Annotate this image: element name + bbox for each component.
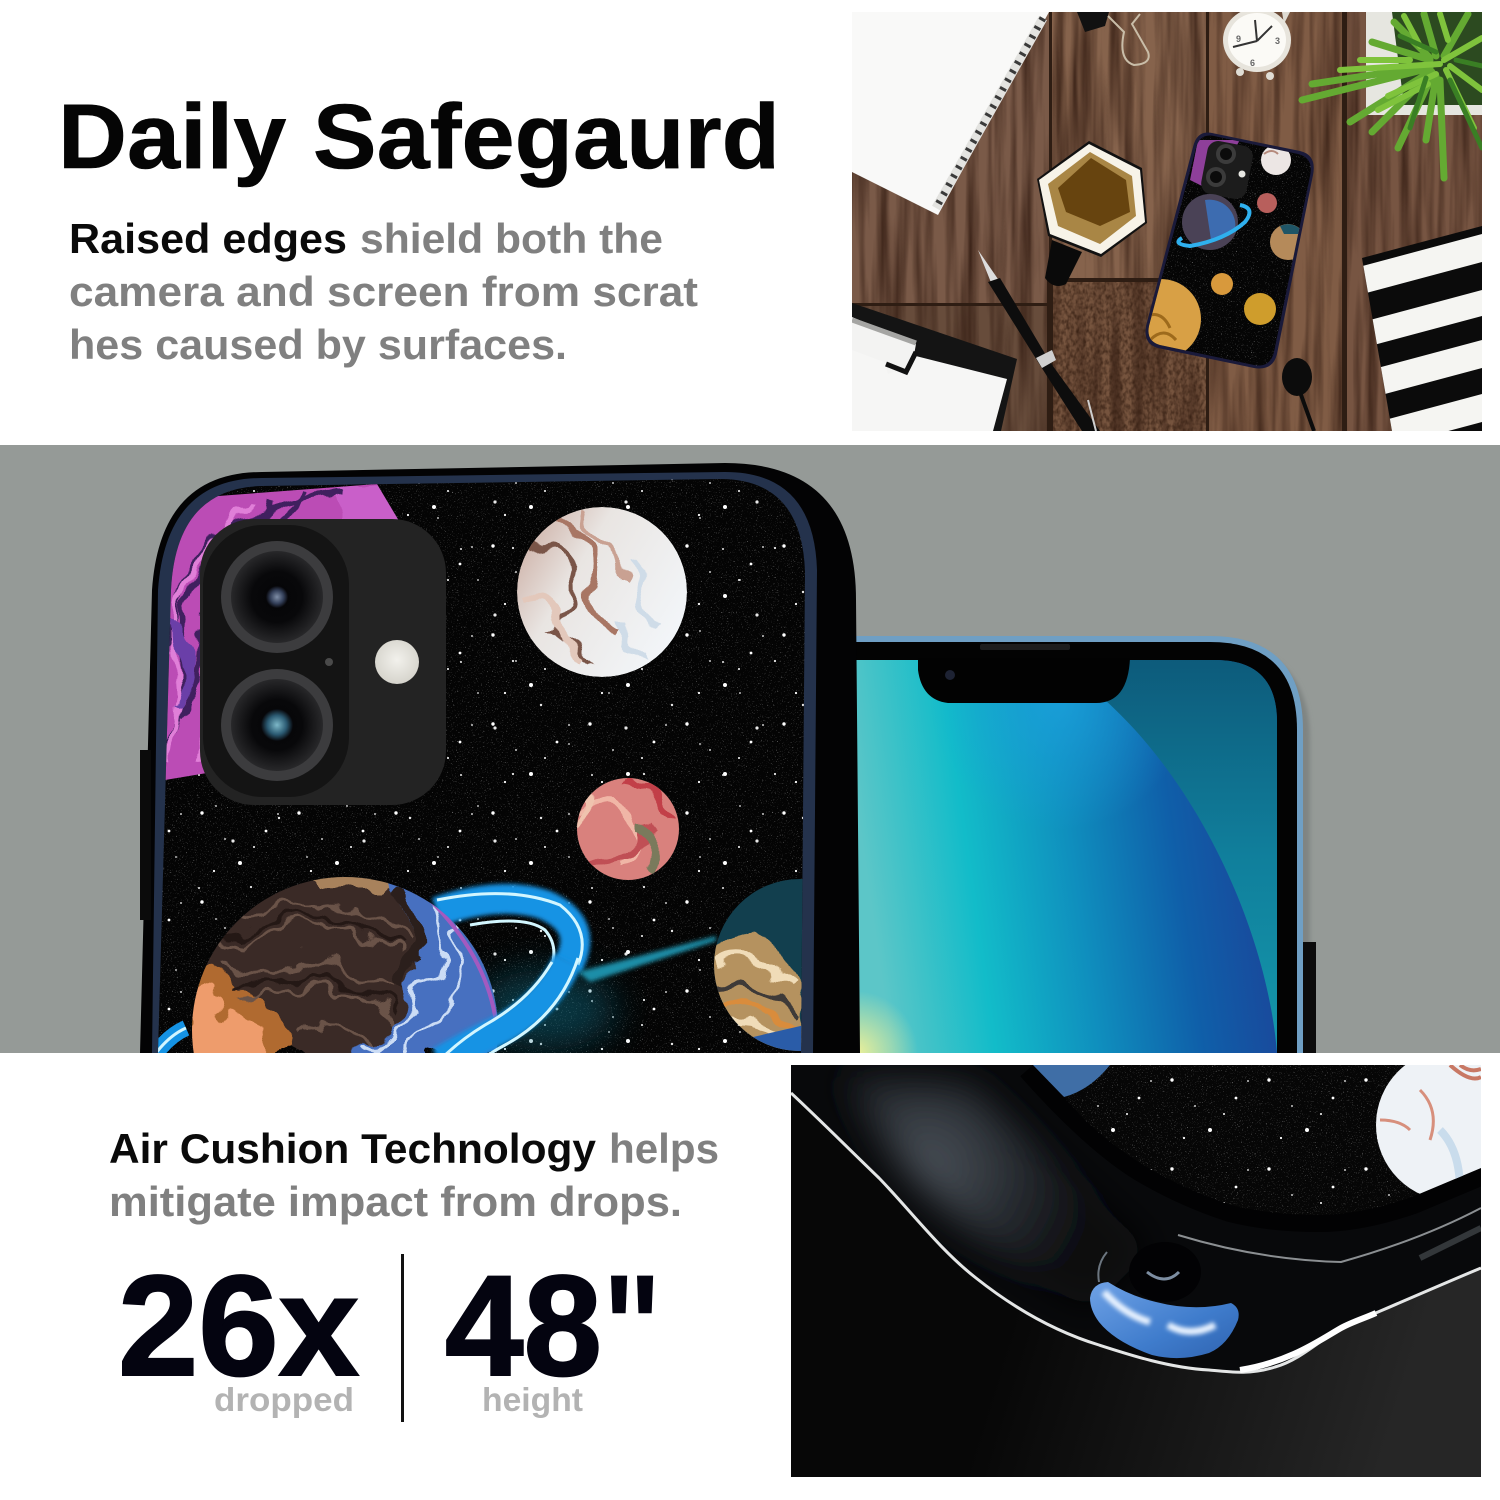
text block: air cushion: helps <box>609 1125 719 1172</box>
clipboard <box>852 303 1017 431</box>
plant <box>1302 12 1482 178</box>
grey band panel <box>0 445 1500 1053</box>
photo: bumper close-up with water drop <box>791 1049 1500 1477</box>
stat divider <box>401 1254 404 1422</box>
text block: raised edges description: camera and screen from scrat <box>69 268 698 315</box>
front camera <box>945 670 955 680</box>
side buttons <box>140 750 148 920</box>
flash <box>375 640 419 684</box>
notch <box>918 658 1130 703</box>
purple marble <box>166 484 398 780</box>
ring back <box>437 899 575 965</box>
stat: 48 inch height: 48 <box>445 1247 602 1406</box>
wood desk <box>852 12 1482 431</box>
sensor dot <box>325 658 333 666</box>
stat: 26x dropped: dropped <box>214 1381 354 1418</box>
earphone <box>1282 358 1314 431</box>
starfield region <box>1025 1049 1500 1225</box>
dark inner band <box>1033 1065 1481 1215</box>
stat: 26x dropped: 26x <box>118 1247 359 1406</box>
coffee cup <box>1037 141 1147 286</box>
bumper inner highlight <box>1178 1208 1481 1262</box>
right planet <box>714 879 802 1051</box>
bumper gloss highlight <box>840 1075 1150 1310</box>
clock <box>1223 8 1291 80</box>
side button <box>1303 942 1316 1053</box>
front phone <box>840 636 1316 1053</box>
title: Daily Safegaurd <box>58 86 780 188</box>
screen <box>850 660 1277 1053</box>
text block: raised edges description <box>69 215 698 368</box>
upper lens <box>221 541 333 653</box>
clock: 3 <box>1275 36 1280 46</box>
photo: phone on wooden desk <box>852 8 1485 456</box>
back phone <box>130 460 860 1062</box>
text block: raised edges description: shield both the <box>360 215 663 262</box>
clock: 6 <box>1250 58 1255 68</box>
front phone shadow <box>1289 671 1310 942</box>
stat: 48 inch height <box>445 1247 658 1418</box>
lower lens <box>221 669 333 781</box>
phones illustration <box>130 460 1316 1062</box>
ring teal glow <box>475 970 615 1050</box>
speaker <box>980 644 1070 650</box>
case body <box>140 463 860 1053</box>
front phone body <box>840 636 1303 1053</box>
text block: air cushion: mitigate impact from drops. <box>109 1178 682 1225</box>
ring left segment <box>156 1028 186 1053</box>
comet streak <box>578 936 716 982</box>
stat: 48 inch height: height <box>482 1381 583 1418</box>
glossy bumper <box>791 1065 1481 1372</box>
text block: air cushion <box>109 1125 719 1225</box>
bump base <box>200 519 446 805</box>
camera bump <box>200 519 446 805</box>
binder clip <box>1077 12 1149 65</box>
ringed planet edge <box>1025 1065 1110 1097</box>
clock: 9 <box>1236 34 1241 44</box>
text block: raised edges description: Raised edges <box>69 215 347 262</box>
stat: 48 inch height: '' <box>606 1247 658 1406</box>
marble planet <box>517 505 687 677</box>
text block: air cushion: Air Cushion Technology <box>109 1125 597 1172</box>
mini phone case <box>1146 132 1314 368</box>
white highlight edge <box>791 1093 1481 1372</box>
striped notebook <box>1362 226 1482 431</box>
water drop <box>1090 1242 1239 1358</box>
red planet <box>577 778 679 880</box>
ring front <box>440 960 568 1062</box>
notebook <box>852 12 1049 215</box>
ringed planet <box>158 877 718 1053</box>
lower surface <box>791 1065 1481 1477</box>
starfield <box>150 470 820 1060</box>
marble planet edge <box>1376 1049 1500 1201</box>
pen <box>978 250 1100 431</box>
text block: raised edges description: hes caused by surfaces. <box>69 321 567 368</box>
